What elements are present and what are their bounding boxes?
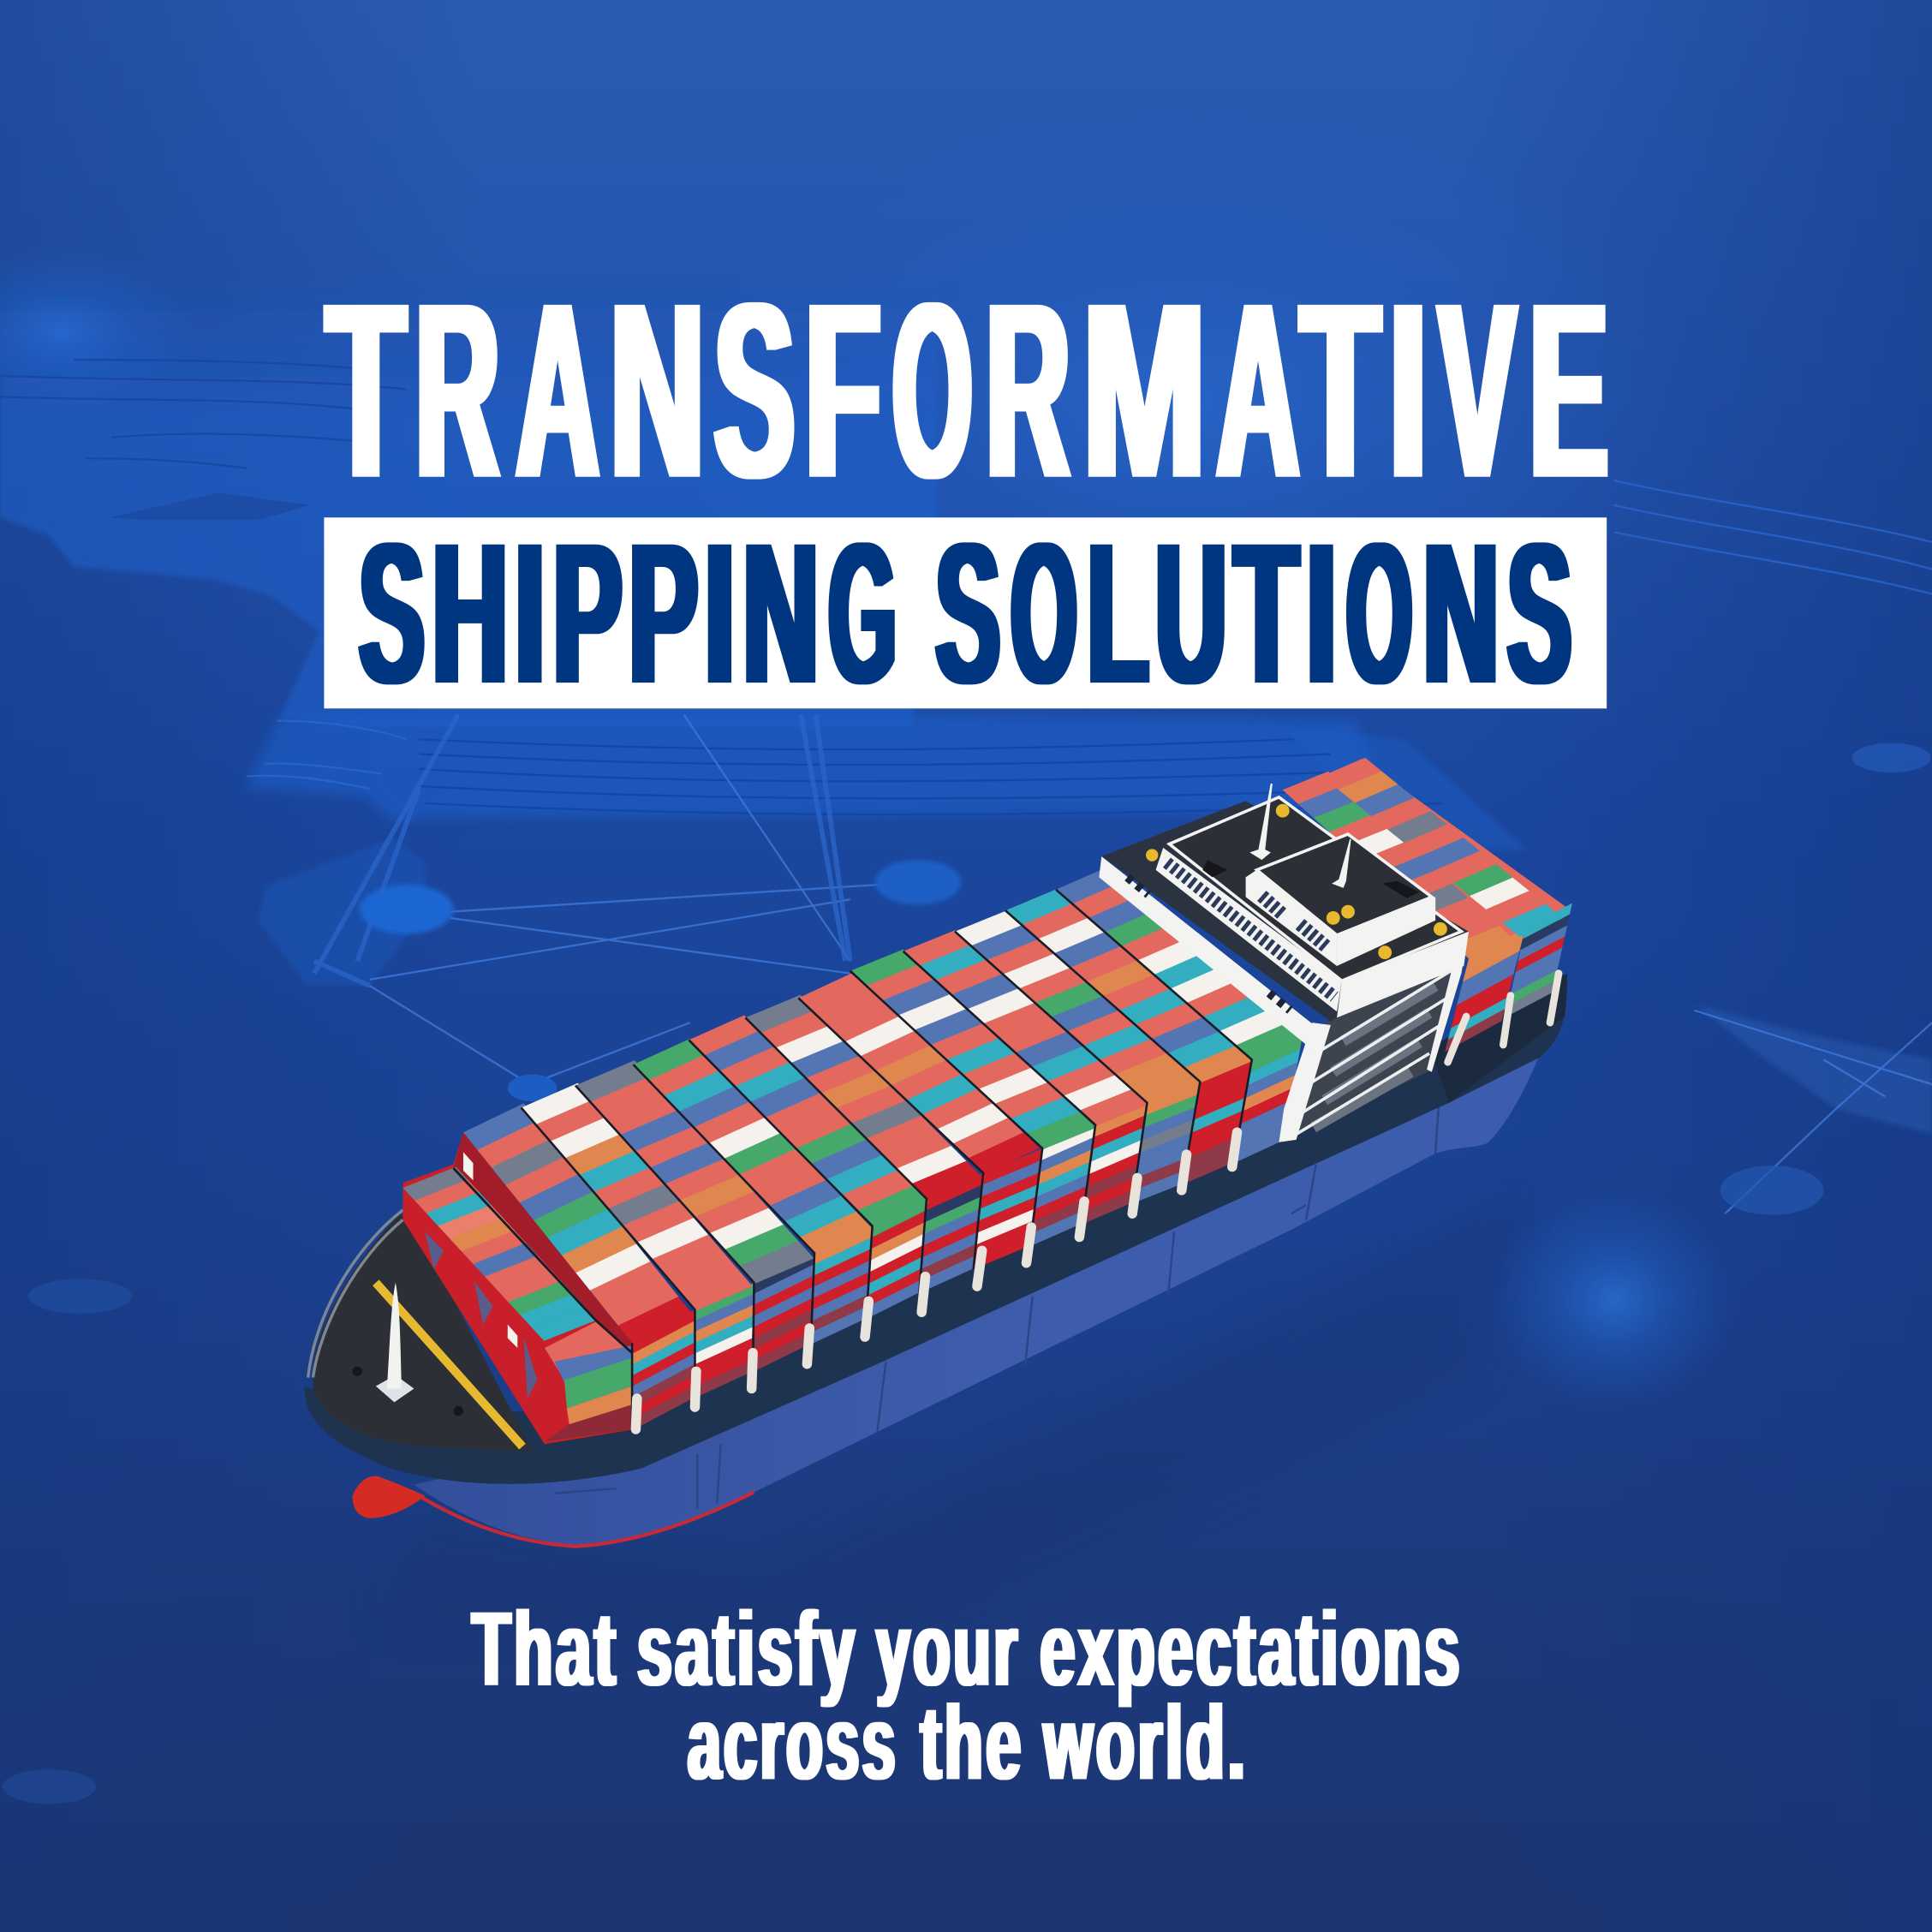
accommodation cage (1284, 943, 1466, 1141)
tagline: your (876, 1590, 1020, 1708)
tagline: the (921, 1685, 1024, 1803)
tier gap (453, 1168, 632, 1353)
shipping network lines and nodes (314, 714, 1932, 1215)
title banner: SHIPPING SOLUTIONS: L (1088, 501, 1149, 725)
level 3 windows (1261, 896, 1326, 946)
title: TRANSFORMATIVE: T (326, 251, 406, 530)
masts (1252, 784, 1272, 859)
text: E (1530, 251, 1608, 530)
base deck (1101, 801, 1469, 1022)
bow deck (313, 1213, 533, 1452)
title banner: SHIPPING SOLUTIONS: U (1155, 501, 1226, 725)
title: TRANSFORMATIVE: S (714, 251, 795, 530)
level 2 (1169, 797, 1461, 981)
title banner: SHIPPING SOLUTIONS: I (1307, 501, 1337, 725)
title banner: SHIPPING SOLUTIONS: I (705, 501, 735, 725)
hull (414, 1047, 1542, 1545)
title: TRANSFORMATIVE: I (1389, 251, 1428, 530)
container top faces (463, 868, 1303, 1344)
title: TRANSFORMATIVE: A (516, 251, 599, 530)
stern deck (1429, 974, 1567, 1103)
deck hatches (376, 1283, 522, 1446)
bow railing (308, 1210, 402, 1378)
tagline (472, 1590, 1463, 1803)
title banner: SHIPPING SOLUTIONS: S (359, 501, 425, 725)
level 3 (1257, 834, 1432, 935)
title banner: SHIPPING SOLUTIONS: S (1507, 501, 1571, 725)
hull reflection (370, 1183, 1528, 1651)
superstructure (1099, 784, 1469, 1142)
title: TRANSFORMATIVE: A (1217, 251, 1299, 530)
title banner: SHIPPING SOLUTIONS: P (629, 501, 698, 725)
bow crane (376, 1283, 414, 1402)
title: TRANSFORMATIVE: R (415, 251, 499, 530)
title banner: SHIPPING SOLUTIONS: N (1423, 501, 1499, 725)
yellow bollards (1146, 804, 1447, 959)
bay gaps (522, 890, 1252, 1429)
world map landmasses (0, 277, 1932, 1804)
level 2 windows (1167, 862, 1334, 997)
stern stacks (1283, 758, 1572, 1052)
stack side faces (632, 1036, 1303, 1430)
title banner: SHIPPING SOLUTIONS: O (1011, 501, 1076, 725)
tagline: expectations (1040, 1590, 1463, 1708)
bow stack: lower tier top (402, 1167, 597, 1341)
tagline: satisfy (637, 1590, 857, 1708)
bow stack: red end wall (402, 1132, 635, 1444)
lashing bridges (635, 1132, 1237, 1429)
title banner: SHIPPING SOLUTIONS: N (743, 501, 819, 725)
tagline: world. (1043, 1685, 1248, 1803)
dark sheer strake (304, 980, 1567, 1484)
title banner: SHIPPING SOLUTIONS: O (1346, 501, 1412, 725)
title: TRANSFORMATIVE: T (1300, 251, 1380, 530)
deck equipment (1202, 860, 1419, 898)
stern lashing (1448, 974, 1559, 1062)
title: TRANSFORMATIVE: F (805, 251, 881, 530)
bulbous bow (352, 1476, 425, 1518)
tagline: across (688, 1685, 898, 1803)
title banner: SHIPPING SOLUTIONS: P (553, 501, 622, 725)
hull panel lines (554, 1099, 1439, 1509)
title: TRANSFORMATIVE: N (610, 251, 705, 530)
title: TRANSFORMATIVE: V (1439, 251, 1517, 530)
title banner: SHIPPING SOLUTIONS: G (829, 501, 897, 725)
red keel line (419, 1492, 754, 1547)
tagline: That (472, 1590, 618, 1708)
title banner: SHIPPING SOLUTIONS: I (515, 501, 546, 725)
title banner: SHIPPING SOLUTIONS: S (936, 501, 1000, 725)
title: TRANSFORMATIVE: R (987, 251, 1070, 530)
title: TRANSFORMATIVE: M (1082, 251, 1206, 530)
map contour lines (0, 360, 1932, 814)
title banner: SHIPPING SOLUTIONS: T (1234, 501, 1298, 725)
title banner: SHIPPING SOLUTIONS (324, 501, 1607, 725)
container ship (304, 758, 1572, 1547)
title banner: SHIPPING SOLUTIONS: H (432, 501, 508, 725)
title: TRANSFORMATIVE: O (893, 251, 972, 530)
